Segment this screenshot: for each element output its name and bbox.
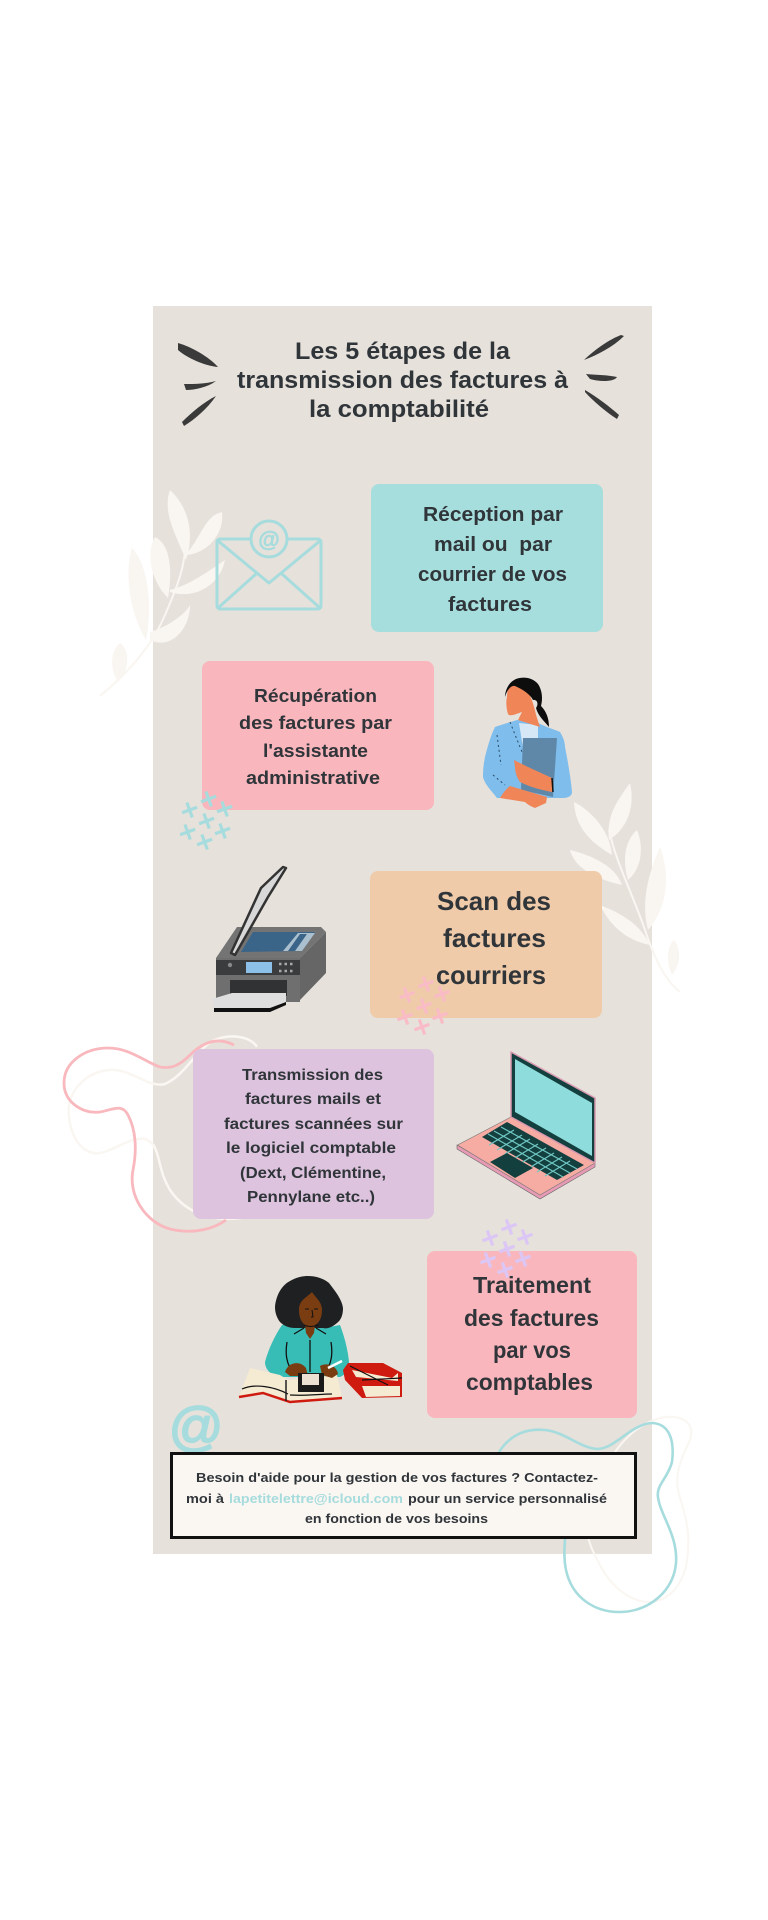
callout: contact footer: pour un service personnalisé [408, 1491, 607, 1506]
decorative curve pink left [64, 1041, 234, 1231]
panel: step 2 recuperation: des factures par [239, 713, 392, 733]
icon: at sign: @ [169, 1397, 223, 1457]
heading: Les 5 étapes de la [295, 338, 511, 365]
panel: step 5 traitement [427, 1242, 637, 1418]
panel: step 5 traitement: comptables [466, 1369, 593, 1395]
icon: teal plus cluster [180, 792, 232, 850]
panel: step 1 reception: Réception par [423, 504, 563, 526]
callout: contact footer: Besoin d'aide pour la gestion de vos factures ? Contactez- [196, 1470, 598, 1485]
panel: step 3 scan: Scan des [437, 886, 551, 916]
panel: step 3 scan [370, 871, 602, 1018]
panel: step 3 scan: courriers [436, 960, 546, 990]
panel: step 2 recuperation: l'assistante [263, 741, 368, 761]
icon: pink plus cluster [398, 976, 450, 1034]
decorative leaf right [570, 783, 680, 992]
panel: step 1 reception [371, 484, 603, 632]
callout: contact footer: lapetitelettre@icloud.com [229, 1491, 403, 1506]
brush sparks left of heading [178, 343, 218, 426]
icon: envelope with at sign [217, 521, 321, 609]
panel: step 5 traitement: Traitement [473, 1272, 591, 1298]
panel: beige background [153, 306, 652, 1554]
panel: step 2 recuperation: Récupération [254, 686, 377, 706]
illustration: laptop [457, 1052, 595, 1199]
panel: step 4 transmission: (Dext, Clémentine, [240, 1165, 386, 1182]
panel: step 5 traitement: par vos [493, 1337, 571, 1363]
decorative leaf left [100, 490, 225, 696]
callout: contact footer: moi à [186, 1491, 225, 1506]
callout: contact footer [172, 1454, 636, 1538]
decorative curve cream left [69, 1036, 257, 1219]
panel: step 1 reception: courrier de vos [418, 564, 567, 586]
decorative curve teal right [499, 1423, 676, 1612]
illustration: accountant woman with calculator and binders [239, 1276, 402, 1402]
illustration: assistant woman with folder [483, 678, 572, 808]
panel: step 2 recuperation [202, 661, 434, 810]
heading [237, 338, 569, 423]
heading: transmission des factures à [237, 367, 569, 394]
panel: step 5 traitement: des factures [464, 1305, 599, 1331]
icon: purple plus cluster [482, 1220, 532, 1256]
panel: step 4 transmission: Pennylane etc..) [247, 1189, 375, 1206]
brush sparks right of heading [584, 335, 624, 419]
heading: la comptabilité [309, 396, 489, 423]
panel: step 1 reception: mail ou par [434, 534, 552, 556]
panel: step 2 recuperation: administrative [246, 768, 380, 788]
panel: step 4 transmission: factures scannées sur [224, 1116, 403, 1133]
panel: step 1 reception: factures [448, 594, 532, 616]
panel: step 4 transmission: le logiciel comptable [226, 1140, 396, 1157]
callout: contact footer: en fonction de vos besoins [305, 1511, 488, 1526]
panel: step 4 transmission: factures mails et [245, 1091, 382, 1108]
icon: envelope with at sign: @ [258, 527, 280, 552]
panel: step 3 scan: factures [443, 923, 546, 953]
decorative curve cream right [588, 1417, 691, 1602]
panel: step 4 transmission: Transmission des [242, 1067, 383, 1084]
illustration: scanner printer [212, 867, 326, 1012]
panel: step 4 transmission [193, 1049, 434, 1219]
